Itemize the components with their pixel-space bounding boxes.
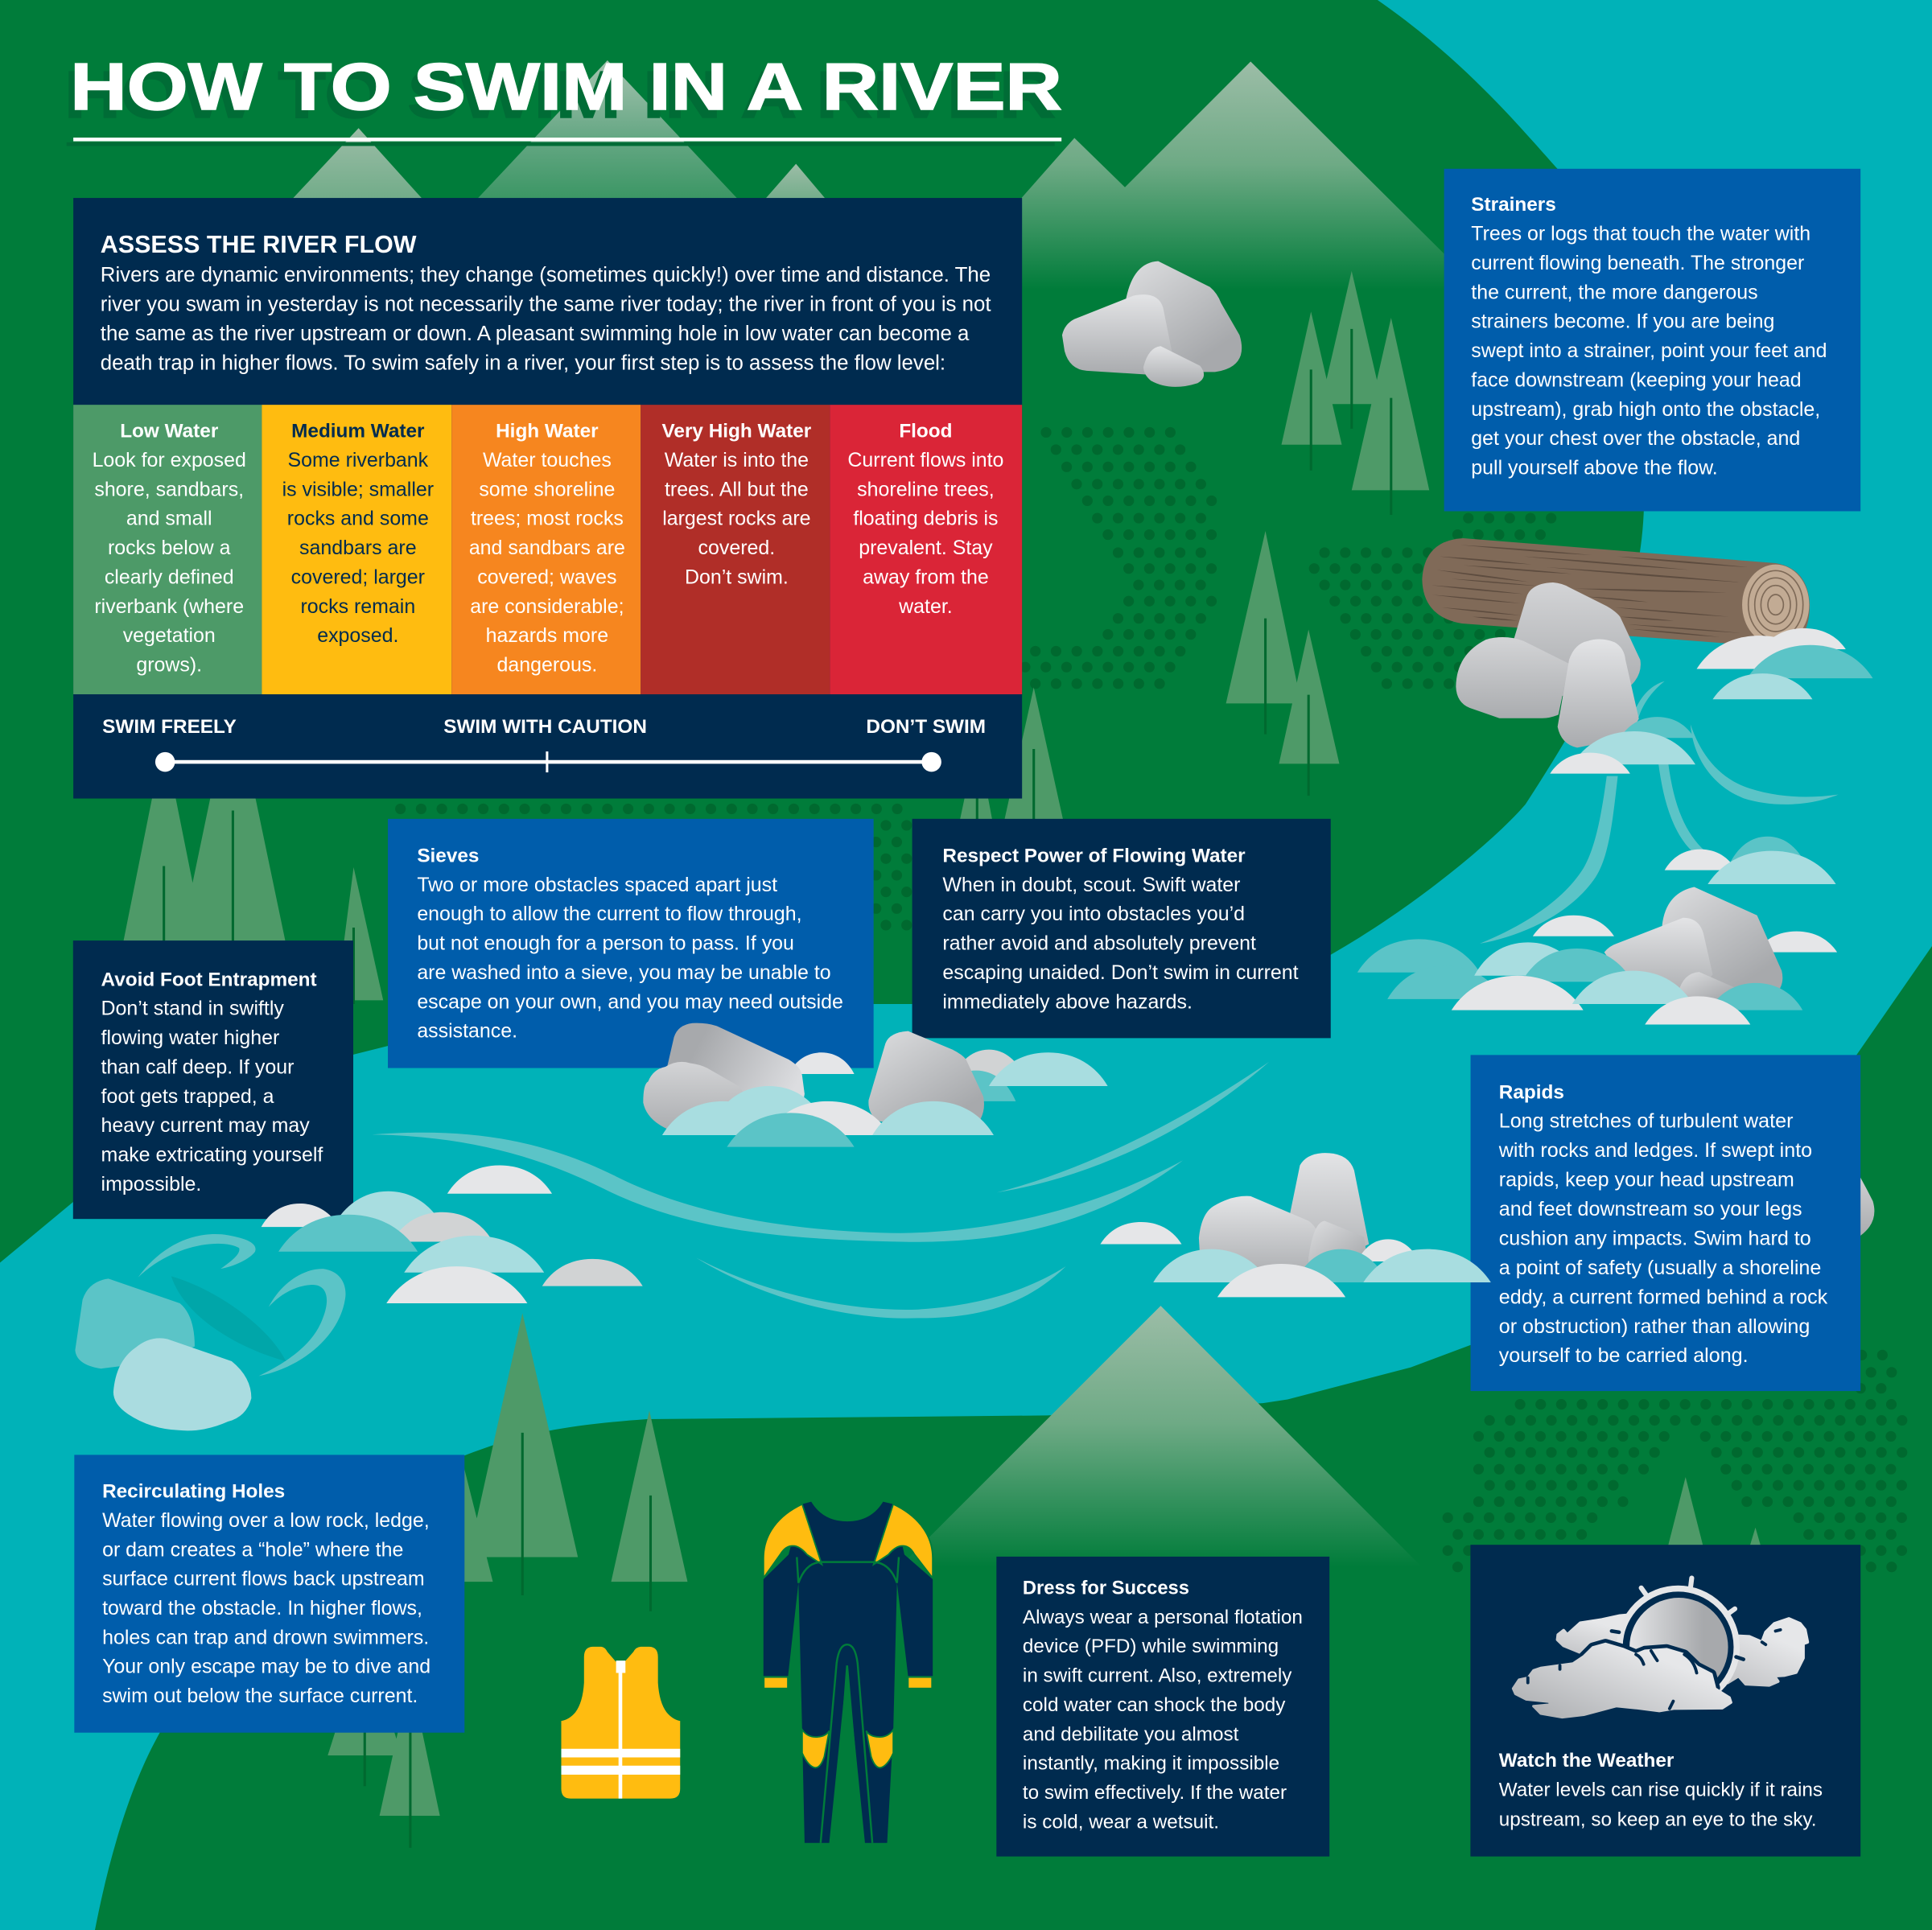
mountain: lower foreground: [900, 1306, 1422, 1567]
panel: rapids: or obstruction) rather than allowing: [1499, 1315, 1810, 1338]
panel: rapids: [1471, 1055, 1860, 1391]
column: high water: dangerous.: [496, 654, 597, 677]
flow scale slider: [155, 751, 941, 772]
panel: rapids: a point of safety (usually a shoreline: [1499, 1257, 1821, 1279]
column: flood: prevalent. Stay: [859, 537, 993, 559]
panel: rapids: eddy, a current formed behind a rock: [1499, 1286, 1828, 1308]
title: HOW TO SWIM IN A RIVER: [70, 49, 1062, 124]
intro text: death trap in higher flows. To swim safely in a river, your first step is to assess the flow level:: [101, 352, 945, 374]
column: high water: High Water: [496, 421, 599, 442]
column: high water: covered; waves: [477, 566, 617, 588]
column: flood: Current flows into: [847, 449, 1003, 471]
intro text: river you swam in yesterday is not necessarily the same river today; the river in front of you is not: [101, 293, 991, 315]
column: high water: [451, 405, 641, 694]
column: flood: Flood: [899, 421, 953, 442]
scale labels: [102, 716, 986, 738]
rocks at log: [1456, 582, 1641, 747]
column: very high water: Don’t swim.: [685, 566, 789, 588]
column: high water: and sandbars are: [469, 537, 625, 559]
sieve rocks and water humps: [643, 1023, 1108, 1147]
rock behind rapids panel: [1855, 1171, 1874, 1236]
icon: wetsuit: [764, 1502, 933, 1843]
column: flood: water.: [898, 595, 953, 618]
panel: dress for success: and debilitate you almost: [1023, 1723, 1239, 1745]
panel: recirculating holes: Recirculating Holes: [102, 1481, 285, 1503]
lower river bank: [95, 946, 1932, 1930]
panel: rapids: cushion any impacts. Swim hard to: [1499, 1227, 1811, 1249]
panel: rapids: Long stretches of turbulent water: [1499, 1110, 1793, 1133]
column: medium water: exposed.: [317, 624, 398, 647]
panel: sieves: Two or more obstacles spaced apart just: [417, 874, 777, 896]
column: very high water: [641, 405, 830, 694]
column: high water: trees; most rocks: [471, 508, 624, 530]
rapids group humps and rocks: [1357, 837, 1837, 1025]
panel: dress for success: Always wear a personal flotation: [1023, 1607, 1303, 1628]
panel: avoid foot entrapment: foot gets trapped, a: [101, 1085, 274, 1108]
heading: assess: ASSESS THE RIVER FLOW: [101, 231, 417, 258]
column: flood: shoreline trees,: [857, 478, 995, 500]
panel: sieves: escape on your own, and you may need outside: [417, 990, 843, 1013]
trees: upper right group: [956, 271, 1429, 837]
column: medium water: rocks remain: [300, 595, 415, 618]
panel: respect power of flowing water: can carry you into obstacles you’d: [942, 903, 1245, 925]
panel: recirculating holes: swim out below the surface current.: [102, 1685, 418, 1707]
panel: dress for success: to swim effectively. If the water: [1023, 1782, 1287, 1804]
intro text: the same as the river upstream or down. A pleasant swimming hole in low water can become a: [101, 323, 970, 345]
panel: avoid foot entrapment: make extricating yourself: [101, 1144, 323, 1167]
panel: avoid foot entrapment: than calf deep. If your: [101, 1056, 294, 1078]
column: medium water: rocks and some: [287, 508, 429, 530]
column: medium water: Some riverbank: [288, 449, 429, 471]
panel: dress for success: is cold, wear a wetsuit.: [1023, 1811, 1219, 1833]
column: low water: Look for exposed: [93, 449, 246, 471]
panel: recirculating holes: surface current flows back upstream: [102, 1568, 425, 1591]
panel: avoid foot entrapment: flowing water higher: [101, 1027, 279, 1049]
panel: sieves: enough to allow the current to flow through,: [417, 903, 802, 925]
panel: avoid foot entrapment: [73, 940, 353, 1219]
panel: recirculating holes: toward the obstacle. In higher flows,: [102, 1597, 422, 1619]
upper river bank: [0, 0, 1644, 1263]
column: medium water: is visible; smaller: [282, 478, 434, 500]
panel: strainers: current flowing beneath. The stronger: [1471, 252, 1804, 274]
panel: recirculating holes: Water flowing over a low rock, ledge,: [102, 1509, 430, 1532]
river current lines: [372, 681, 1839, 1319]
panel: strainers: Strainers: [1471, 194, 1556, 216]
panel: recirculating holes: or dam creates a “hole” where the: [102, 1538, 403, 1561]
dot texture: [401, 432, 1902, 1567]
panel: respect power of flowing water: escaping unaided. Don’t swim in current: [942, 961, 1299, 984]
panel: recirculating holes: Your only escape may be to dive and: [102, 1656, 430, 1678]
title: [64, 49, 1062, 146]
column: very high water: Very High Water: [662, 421, 812, 442]
panel: respect power of flowing water: [912, 819, 1331, 1038]
rapids rocks and humps: [1100, 1153, 1491, 1297]
column: high water: hazards more: [486, 624, 608, 647]
strainer water humps back: [1697, 628, 1872, 699]
trees: lower group: [327, 1313, 1763, 1848]
panel: assess the river flow: [73, 198, 1022, 799]
column: low water: and small: [126, 508, 212, 530]
column: high water: are considerable;: [470, 595, 624, 618]
column: high water: Water touches: [483, 449, 612, 471]
panel: recirculating holes: holes can trap and drown swimmers.: [102, 1626, 429, 1648]
mountains: upper right range: [974, 62, 1485, 290]
column: flood: floating debris is: [853, 508, 999, 530]
panel: strainers: get your chest over the obstacle, and: [1471, 427, 1800, 450]
intro text: Rivers are dynamic environments; they change (sometimes quickly!) over time and distance. The: [101, 264, 991, 286]
panel: avoid foot entrapment: Don’t stand in swiftly: [101, 998, 284, 1020]
column: flood: [830, 405, 1022, 694]
panel: strainers: face downstream (keeping your head: [1471, 368, 1802, 391]
scale labels: SWIM WITH CAUTION: [443, 716, 647, 738]
trees: left group: [117, 689, 383, 1004]
panel: respect power of flowing water: immediately above hazards.: [942, 990, 1193, 1013]
column: very high water: trees. All but the: [665, 478, 809, 500]
water humps under log rocks: [1550, 717, 1695, 774]
panel: sieves: [388, 819, 874, 1068]
scale labels: SWIM FREELY: [102, 716, 237, 738]
panel: strainers: pull yourself above the flow.: [1471, 457, 1718, 479]
panel: sieves: assistance.: [417, 1020, 517, 1043]
column: medium water: [262, 405, 451, 694]
panel: watch the weather: Water levels can rise quickly if it rains: [1499, 1780, 1823, 1801]
column: low water: [73, 405, 262, 694]
column: flood: away from the: [863, 566, 989, 588]
panel: watch the weather: upstream, so keep an eye to the sky.: [1499, 1809, 1817, 1830]
column: low water: shore, sandbars,: [94, 478, 244, 500]
panel: respect power of flowing water: When in doubt, scout. Swift water: [942, 874, 1241, 896]
log: [1422, 538, 1810, 645]
panel: watch the weather: Watch the Weather: [1499, 1750, 1675, 1772]
panel: rapids: rapids, keep your head upstream: [1499, 1169, 1794, 1191]
intro text: [101, 264, 991, 374]
panel: strainers: swept into a strainer, point your feet and: [1471, 339, 1827, 362]
panel: dress for success: cold water can shock the body: [1023, 1694, 1286, 1716]
panel: rapids: and feet downstream so your legs: [1499, 1198, 1802, 1220]
panel: strainers: [1444, 169, 1860, 511]
panel: dress for success: Dress for Success: [1023, 1578, 1189, 1599]
column: low water: Low Water: [120, 421, 219, 442]
column: very high water: Water is into the: [665, 449, 809, 471]
panel: strainers: Trees or logs that touch the water with: [1471, 223, 1810, 245]
panel: respect power of flowing water: Respect Power of Flowing Water: [942, 845, 1246, 866]
column: medium water: covered; larger: [291, 566, 425, 588]
column: low water: clearly defined: [105, 566, 234, 588]
panel: rapids: yourself to be carried along.: [1499, 1344, 1749, 1367]
panel: dress for success: [996, 1557, 1329, 1857]
panel: strainers: upstream), grab high onto the obstacle,: [1471, 398, 1820, 421]
icon: life vest: [561, 1647, 680, 1799]
rocks on bank: [1062, 261, 1242, 387]
column: low water: riverbank (where: [94, 595, 244, 618]
panel: avoid foot entrapment: Avoid Foot Entrapment: [101, 969, 317, 990]
panel: sieves: are washed into a sieve, you may be unable to: [417, 961, 831, 984]
column: very high water: largest rocks are: [662, 508, 811, 530]
panel: strainers: strainers become. If you are being: [1471, 311, 1774, 333]
panel: dress for success: device (PFD) while swimming: [1023, 1636, 1279, 1657]
panel: avoid foot entrapment: impossible.: [101, 1173, 201, 1195]
recirculating hole illustration: [75, 1234, 345, 1430]
icon: sun and clouds: [1513, 1578, 1807, 1718]
column: low water: vegetation: [123, 624, 216, 647]
column: high water: some shoreline: [479, 478, 615, 500]
column: low water: rocks below a: [108, 537, 231, 559]
title: HOW TO SWIM IN A RIVER: [64, 57, 1056, 132]
scale labels: DON’T SWIM: [866, 716, 986, 738]
panel: strainers: the current, the more dangerous: [1471, 281, 1758, 303]
left water humps: [262, 1166, 643, 1303]
panel: dress for success: instantly, making it impossible: [1023, 1753, 1279, 1775]
column: very high water: covered.: [698, 537, 775, 559]
column: medium water: sandbars are: [299, 537, 417, 559]
panel: sieves: but not enough for a person to pass. If you: [417, 932, 794, 955]
panel: dress for success: in swift current. Also, extremely: [1023, 1665, 1292, 1687]
panel: rapids: with rocks and ledges. If swept into: [1498, 1139, 1812, 1162]
panel: recirculating holes: [74, 1455, 464, 1733]
panel: sieves: Sieves: [417, 845, 479, 866]
column: medium water: Medium Water: [291, 421, 425, 442]
mountains: upper left range: [288, 60, 830, 204]
column: low water: grows).: [136, 654, 202, 677]
panel: respect power of flowing water: rather avoid and absolutely prevent: [942, 932, 1256, 955]
panel: watch the weather: [1470, 1545, 1860, 1857]
panel: rapids: Rapids: [1499, 1081, 1564, 1103]
panel: avoid foot entrapment: heavy current may may: [101, 1114, 310, 1137]
